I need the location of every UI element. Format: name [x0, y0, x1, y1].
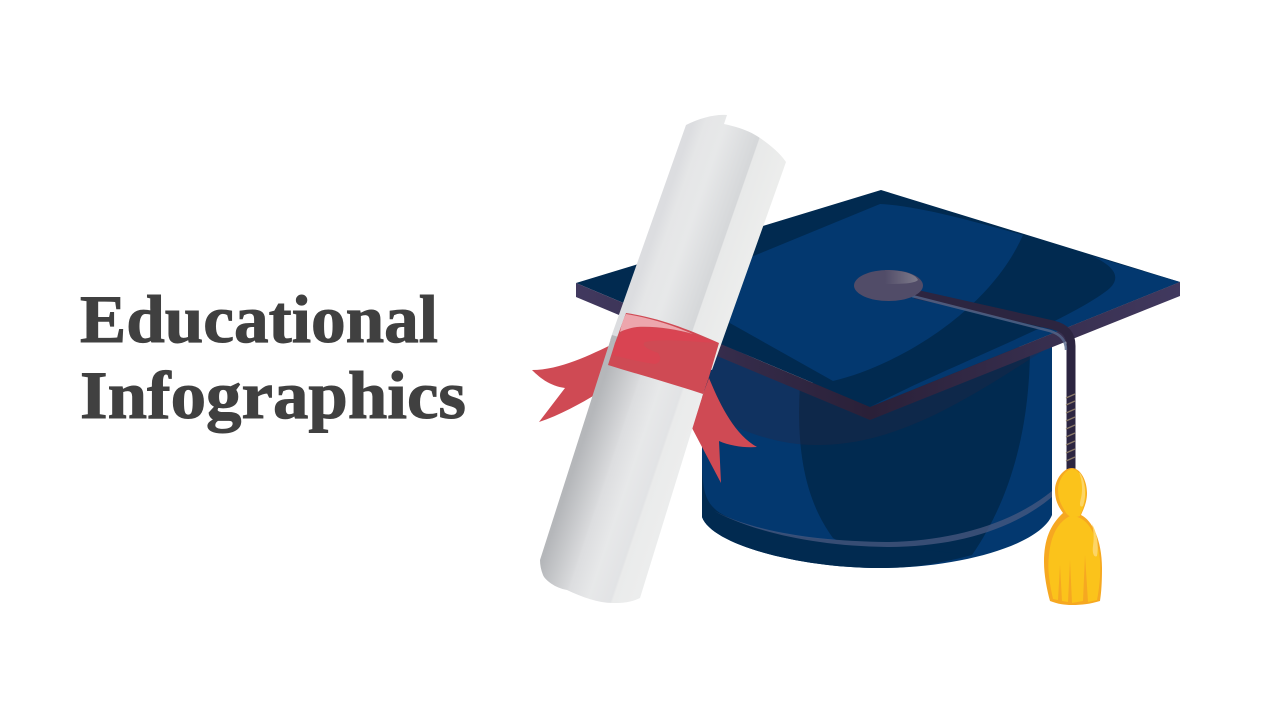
board side left — [576, 283, 870, 420]
ribbon band — [608, 313, 719, 394]
board light centre panel — [700, 204, 1023, 381]
tassel head — [1058, 469, 1086, 517]
cord windings — [1066, 394, 1075, 461]
cap rim highlight — [705, 491, 1052, 547]
scroll lower part — [540, 335, 712, 603]
title: Infographics — [80, 357, 466, 433]
ribbon tail right — [692, 378, 757, 483]
scroll upper part — [610, 115, 786, 370]
ribbon bright fold — [612, 327, 717, 364]
tassel — [1044, 468, 1102, 605]
board top — [576, 190, 1180, 407]
board light corner — [870, 256, 1180, 407]
cap base lower rim — [702, 467, 972, 568]
button highlight — [885, 270, 918, 284]
ribbon shine — [620, 314, 693, 334]
ribbon tail left — [532, 343, 615, 422]
title: Educational — [80, 281, 438, 357]
title — [80, 281, 466, 433]
tassel shine — [1079, 472, 1098, 556]
cord highlight — [912, 296, 1066, 350]
board side right — [870, 282, 1180, 420]
button — [854, 270, 923, 301]
tassel cord — [912, 294, 1075, 470]
cap base shaded crescent — [799, 345, 1030, 566]
icon: diploma scroll — [532, 115, 786, 603]
shadow under the board — [702, 335, 1052, 445]
icon: graduation cap — [576, 190, 1180, 605]
tassel skirt — [1048, 516, 1100, 603]
cap base — [702, 335, 1052, 568]
